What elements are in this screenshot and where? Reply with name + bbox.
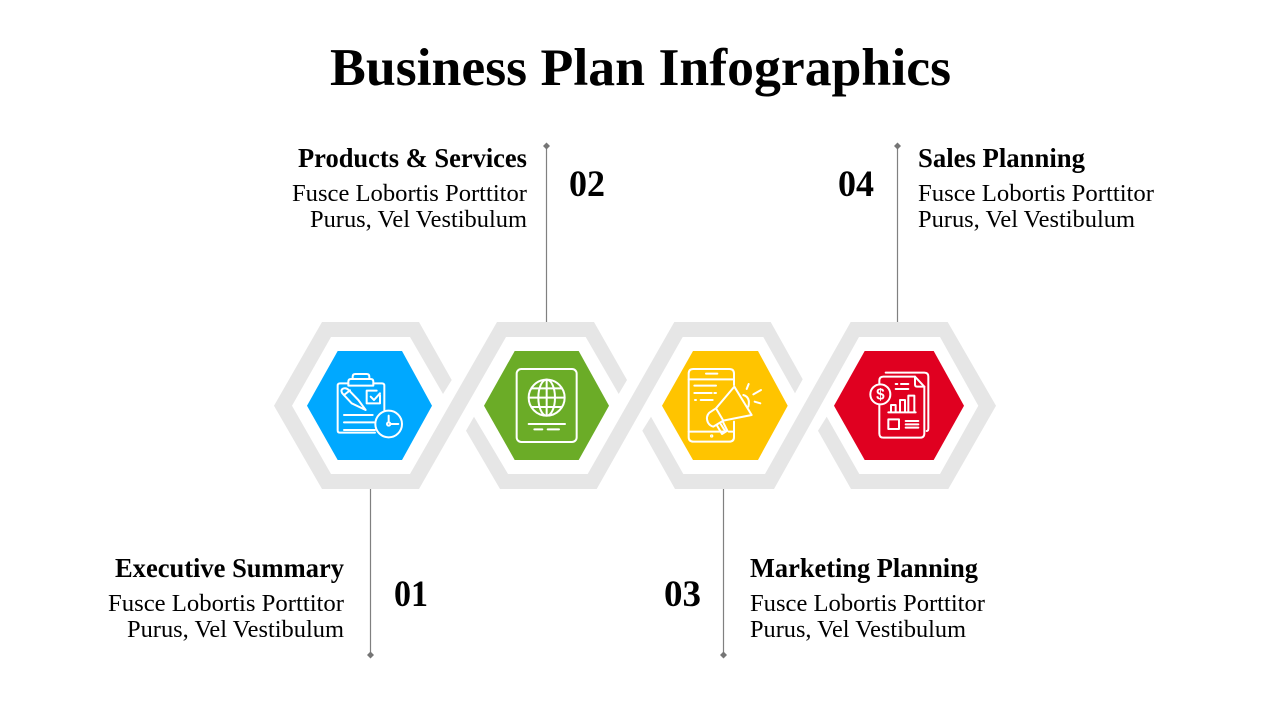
hexagon: blue — [307, 351, 432, 460]
block: step 01 Executive Summary: Executive Summary — [115, 553, 344, 583]
number 01: 01 — [394, 574, 428, 615]
number 04: 04 — [838, 164, 874, 205]
block: step 04 Sales Planning: Fusce Lobortis Porttitor — [918, 181, 1154, 207]
block: step 03 Marketing Planning — [750, 553, 985, 643]
number 02: 02 — [569, 164, 605, 205]
connector: step 03 — [720, 489, 727, 658]
hexagon: yellow — [662, 351, 788, 460]
icon: financial report: $ — [876, 387, 885, 404]
block: step 01 Executive Summary: Fusce Lobortis Porttitor — [108, 591, 344, 617]
block: step 03 Marketing Planning: Marketing Planning — [750, 553, 978, 583]
block: step 03 Marketing Planning: Purus, Vel Vestibulum — [750, 617, 966, 643]
icon: passport with globe — [517, 369, 577, 442]
block: step 01 Executive Summary: Purus, Vel Vestibulum — [127, 617, 344, 643]
connector: step 02 — [543, 142, 550, 322]
block: step 04 Sales Planning: Purus, Vel Vestibulum — [918, 207, 1135, 233]
block: step 02 Products & Services: Products & Services — [298, 143, 527, 173]
connector: step 01 — [367, 489, 374, 658]
block: step 03 Marketing Planning: Fusce Lobortis Porttitor — [750, 591, 985, 617]
number 03: 03 — [664, 574, 701, 615]
icon: clipboard with clock — [338, 374, 402, 437]
block: step 02 Products & Services: Purus, Vel Vestibulum — [310, 207, 527, 233]
hexagon: green — [484, 351, 609, 460]
connector: step 04 — [894, 142, 901, 322]
interlocking grey hexagon chain — [274, 322, 996, 489]
title: Business Plan Infographics — [330, 39, 951, 97]
icon: phone with megaphone — [689, 369, 761, 442]
block: step 02 Products & Services: Fusce Lobortis Porttitor — [292, 181, 527, 207]
hexagon: red — [834, 351, 964, 460]
block: step 01 Executive Summary — [108, 553, 344, 643]
block: step 04 Sales Planning: Sales Planning — [918, 143, 1085, 173]
icon: financial report — [870, 373, 928, 438]
block: step 04 Sales Planning — [918, 143, 1154, 233]
block: step 02 Products & Services — [292, 143, 527, 233]
